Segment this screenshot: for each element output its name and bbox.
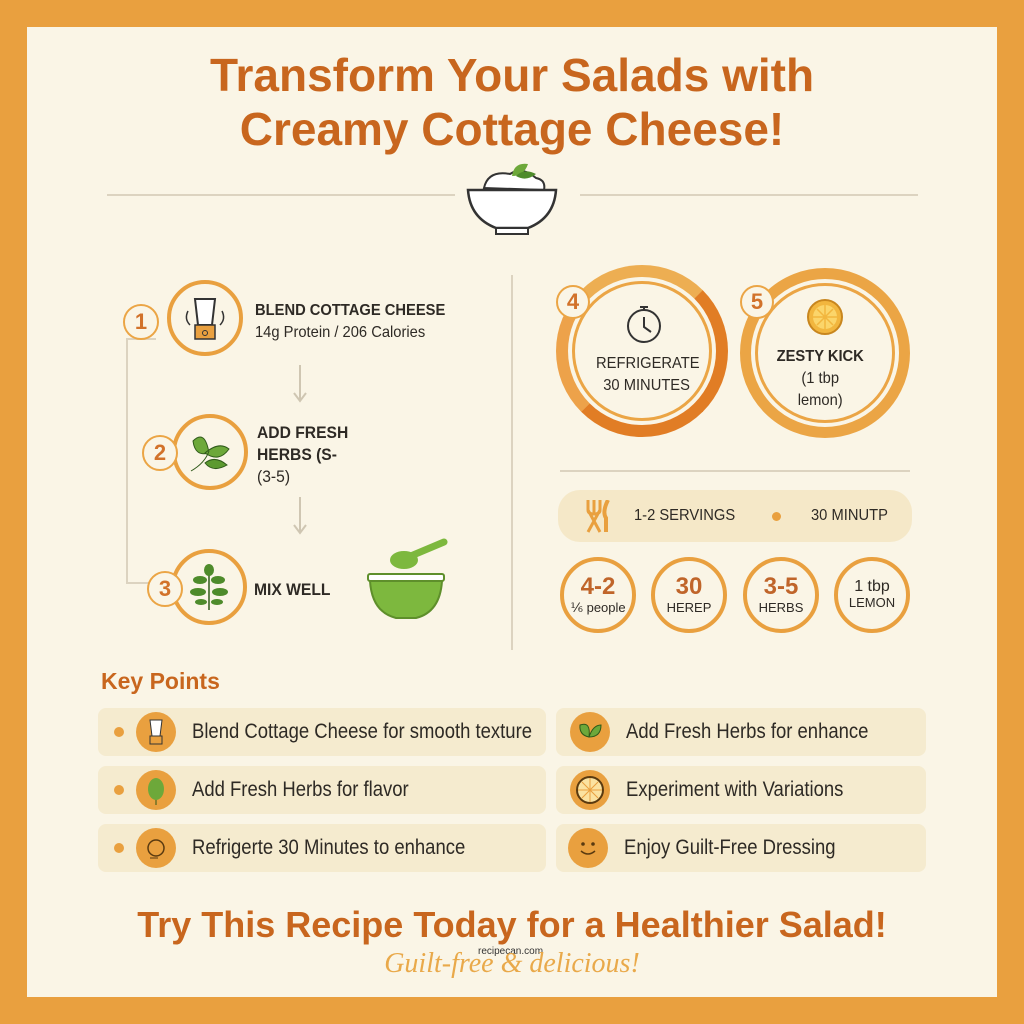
step 3 text: MIX WELL [254,580,330,599]
step 2 text [257,423,348,486]
row: Enjoy Guilt-Free Dressing [624,836,836,859]
step 4 ring: 30 MINUTES [603,377,690,394]
row: Add Fresh Herbs for enhance [626,720,868,743]
step 5 ring: 5 [751,289,763,314]
icon: parsley [171,549,247,625]
icon: fork and knife [586,500,610,533]
row [98,708,546,756]
icon: lemon [807,299,843,335]
text: 3-5 [764,573,798,600]
step 1 text [255,302,445,341]
step 4 ring: REFRIGERATE [596,355,700,372]
bracket line [126,338,156,584]
stat circles: ⅙ people [570,600,626,615]
step 1: 1 [135,309,147,334]
row: Experiment with Variations [626,778,843,801]
arrow [293,365,307,402]
row [556,766,926,814]
step 5 ring: (1 tbp [801,370,839,387]
step 4 ring [556,265,728,437]
stat circles: 4-2 [581,573,615,600]
step 1 text: 14g Protein / 206 Calories [255,324,425,341]
servings pill [558,490,912,542]
step 4 ring: 4 [567,289,579,314]
icon: basil [172,414,248,490]
step 3 [147,549,330,625]
step 5 ring [740,268,910,438]
arrow [293,497,307,534]
watermark: recipecan.com [478,946,543,957]
icon: timer [627,306,661,343]
key points grid [98,708,926,872]
stat circles [560,557,636,633]
step 1 [123,280,445,356]
row [556,708,926,756]
key points heading: Key Points [101,668,220,694]
row: Add Fresh Herbs for flavor [192,778,409,801]
row: Refrigerte 30 Minutes to enhance [192,836,465,859]
text: 30 [676,573,702,600]
text: HEREP [667,600,711,615]
step 1 text: BLEND COTTAGE CHEESE [255,302,445,319]
servings pill: 1-2 SERVINGS [634,507,735,524]
title: Transform Your Salads with [210,49,814,101]
row [556,824,926,872]
step 5 ring: ZESTY KICK [777,348,864,365]
step 2: 2 [154,440,166,465]
step 2 text: ADD FRESH [257,423,348,442]
servings pill: 30 MINUTP [811,507,888,524]
text: LEMON [849,595,895,610]
step 2 text: (3-5) [257,467,290,486]
row [98,824,546,872]
row: Blend Cottage Cheese for smooth texture [192,720,532,743]
title: Creamy Cottage Cheese! [240,103,784,155]
icon: cottage cheese bowl [466,164,558,235]
text: HERBS [759,600,803,615]
icon: blender [167,280,243,356]
tagline: Guilt-free & delicious! [384,948,640,979]
text: 1 tbp [854,578,890,595]
title [210,49,814,155]
step 5 ring: lemon) [798,392,843,409]
footer headline: Try This Recipe Today for a Healthier Salad! [137,904,887,945]
step 2 text: HERBS (S- [257,445,337,464]
row [98,766,546,814]
icon: green bowl with spoon [367,538,448,619]
step 3: 3 [159,576,171,601]
step 2 [142,414,348,490]
